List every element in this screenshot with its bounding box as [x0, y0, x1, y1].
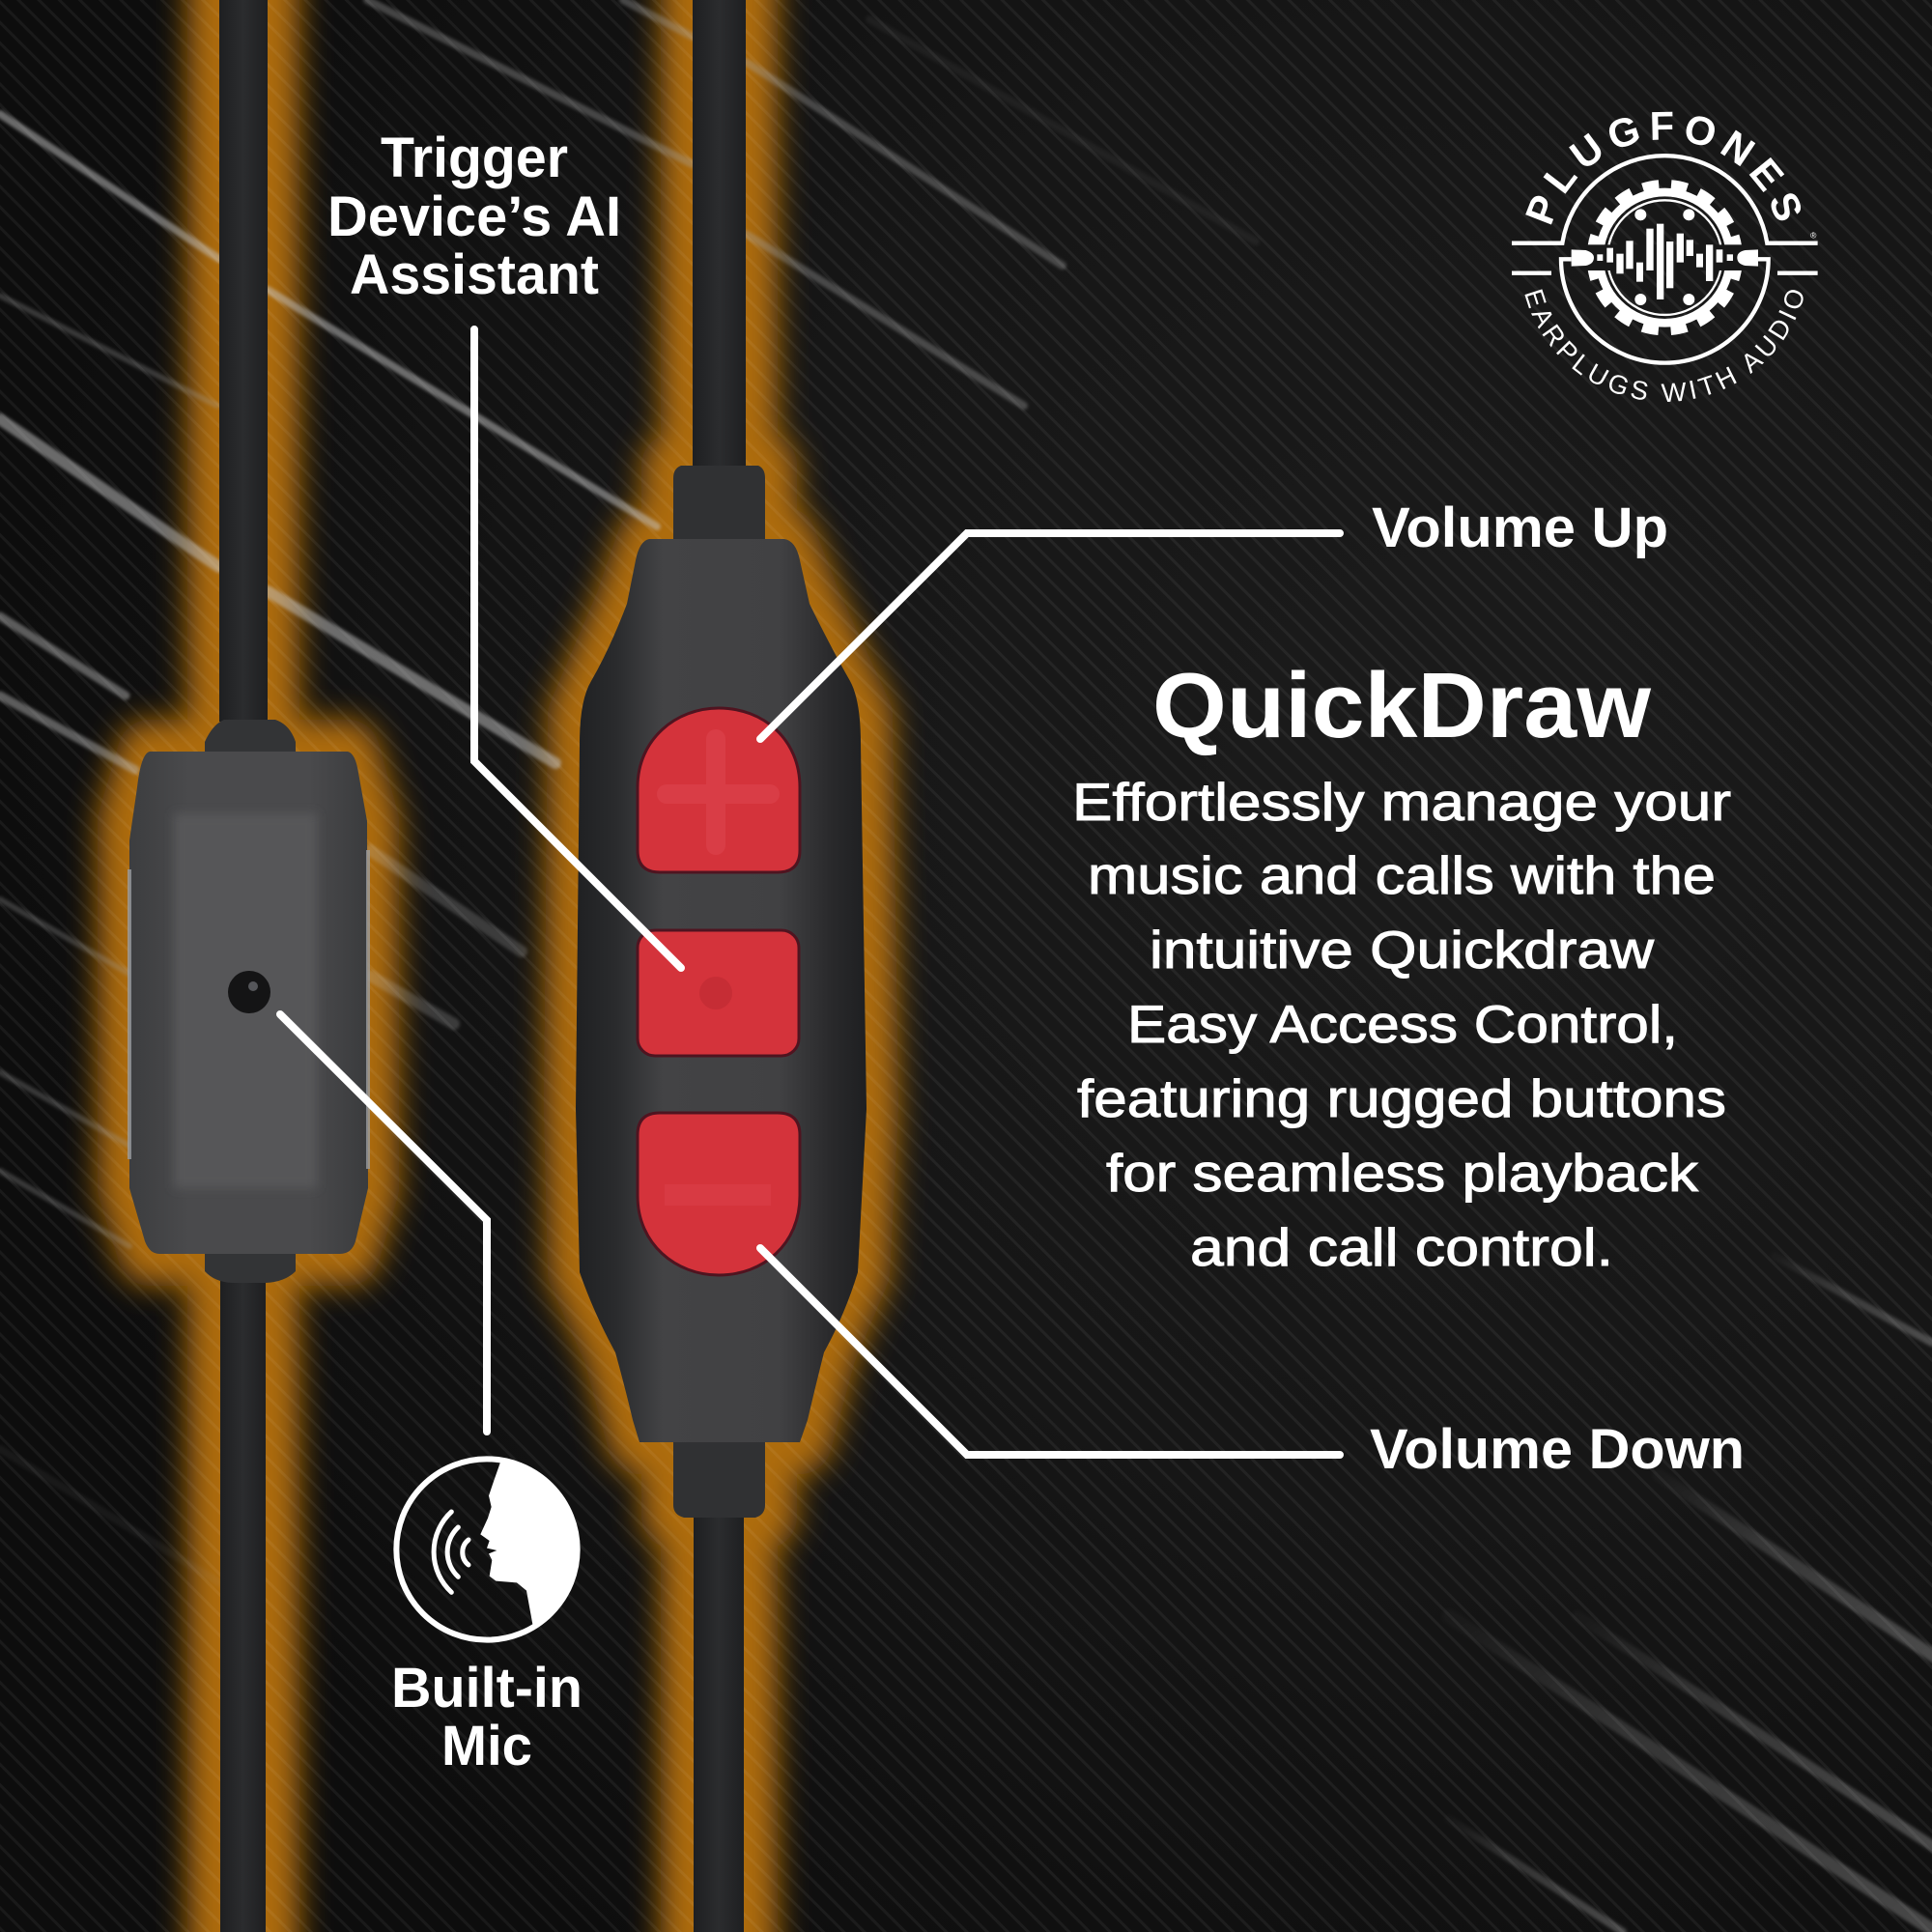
label: volume down: Volume Down — [1370, 1418, 1745, 1481]
mic inner panel — [174, 813, 317, 1188]
logo wordmark: PLUGFONES — [1525, 112, 1801, 224]
leader: AI assistant — [474, 329, 681, 968]
leader lines — [280, 329, 1340, 1455]
label: built-in mic: Mic — [441, 1715, 532, 1777]
logo band cutout — [1581, 244, 1748, 270]
logo waveform — [1597, 224, 1733, 299]
volume down button — [638, 1113, 800, 1275]
description text: for seamless playback — [1106, 1143, 1699, 1203]
center dot — [699, 977, 732, 1009]
left cable and inline mic — [129, 0, 368, 1932]
mic housing — [129, 752, 368, 1254]
mic hole — [228, 971, 270, 1013]
volume up button — [638, 708, 800, 872]
label: volume up: Volume Up — [1372, 497, 1668, 559]
leader: volume up — [760, 533, 1340, 739]
description text: intuitive Quickdraw — [1150, 920, 1654, 980]
orange glow behind cables and remotes — [129, 0, 867, 1932]
logo registered mark: ® — [1810, 231, 1817, 241]
collar top — [673, 466, 765, 539]
leader: mic — [280, 1014, 487, 1432]
label: trigger AI assistant: Device’s AI — [327, 185, 621, 248]
label: built-in mic: Built-in — [391, 1657, 582, 1719]
description text — [1072, 772, 1731, 1277]
description text: Effortlessly manage your — [1072, 772, 1731, 832]
heading: QuickDraw — [1152, 654, 1651, 757]
mic collar top — [205, 720, 296, 753]
AI assistant button — [638, 930, 799, 1056]
mic rim highlights — [129, 850, 368, 1169]
description text: featuring rugged buttons — [1077, 1068, 1726, 1128]
collar bottom — [673, 1440, 765, 1518]
logo screws — [1634, 209, 1694, 305]
remote housing — [576, 539, 867, 1442]
description text: and call control. — [1190, 1217, 1613, 1277]
cable top right — [693, 0, 746, 469]
minus glyph — [665, 1184, 771, 1206]
logo gear — [1593, 185, 1737, 329]
logo outline arcs — [1512, 156, 1818, 363]
cable bottom right — [694, 1515, 744, 1932]
right cable and QuickDraw remote — [576, 0, 867, 1932]
description text: Easy Access Control, — [1127, 994, 1678, 1054]
description text: music and calls with the — [1088, 845, 1716, 905]
label: trigger AI assistant: Assistant — [350, 243, 599, 306]
cable bottom left — [220, 1280, 266, 1932]
label: built-in mic — [391, 1657, 582, 1777]
logo tagline: EARPLUGS WITH AUDIO — [1524, 289, 1804, 402]
leader: volume down — [760, 1248, 1340, 1455]
logo jack plugs — [1572, 249, 1758, 267]
cable top left — [219, 0, 268, 722]
plus glyph — [667, 739, 770, 845]
label: trigger AI assistant: Trigger — [381, 127, 568, 189]
label: trigger AI assistant — [327, 127, 621, 306]
logo: Plugfones — [1512, 112, 1818, 402]
mic collar bottom — [205, 1252, 296, 1283]
icon: speaking head — [396, 1452, 592, 1649]
